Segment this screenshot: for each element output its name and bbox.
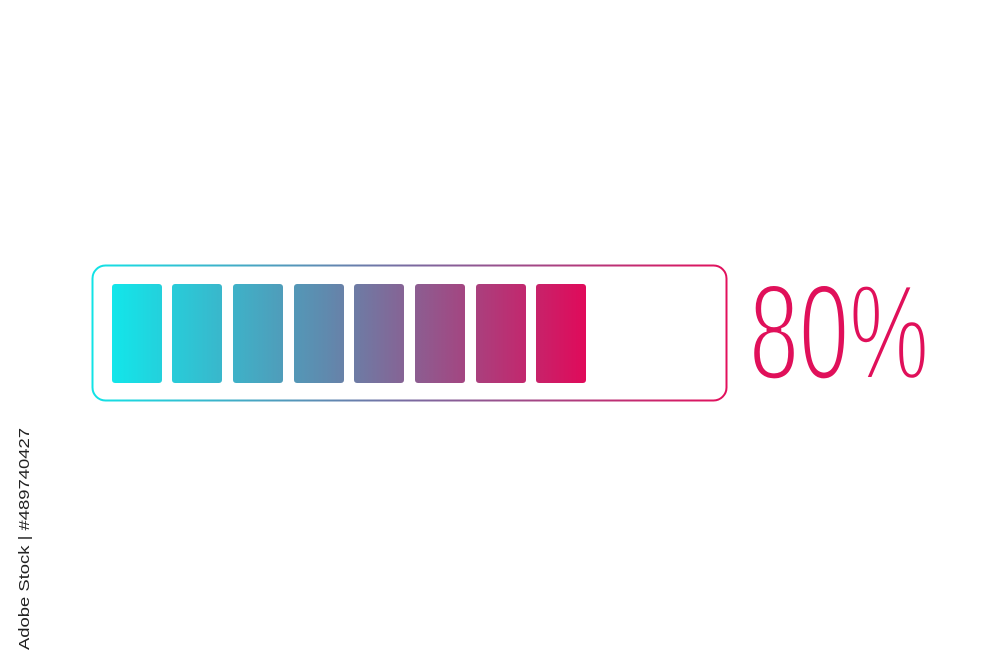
watermark id text: Adobe Stock | #489740427	[16, 428, 33, 650]
bar outline	[92, 266, 726, 400]
filled segments	[112, 284, 586, 383]
